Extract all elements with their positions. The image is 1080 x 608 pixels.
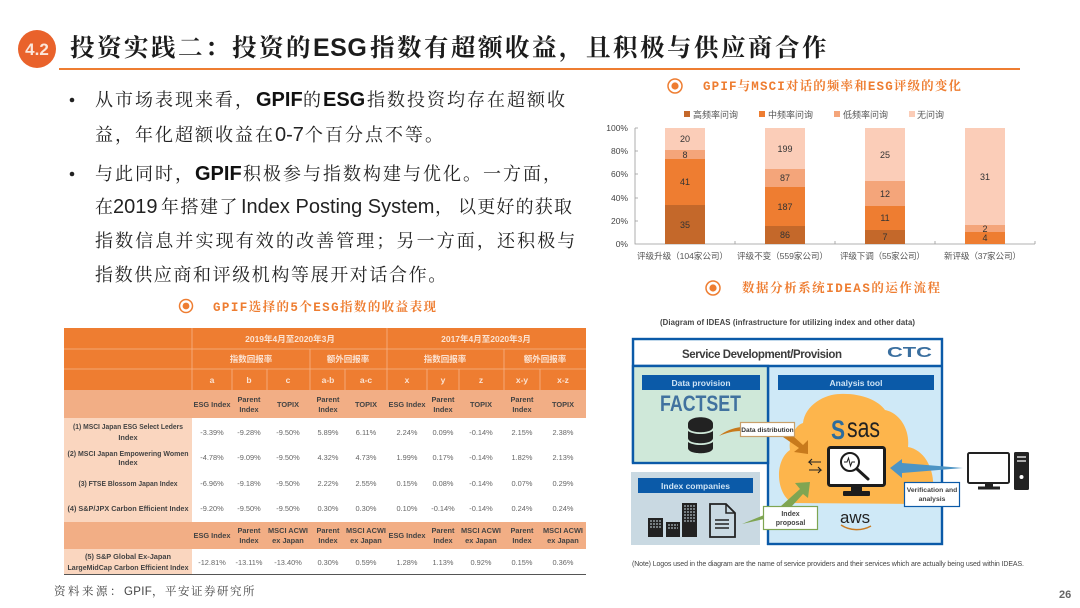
table data rows 1-4: 5.89% [318, 428, 339, 437]
table row 5 [64, 549, 574, 574]
logo: CTC: CTC [887, 344, 932, 361]
icon: analysis monitor [828, 448, 884, 496]
text block: bullet points: 益，年化超额收益在 [95, 125, 275, 145]
table row 5: 0.30% [318, 558, 339, 567]
table row 5: 1.13% [433, 558, 454, 567]
bar: new rating: 新评级（37家公司） [944, 250, 1021, 261]
table data rows 1-4: -9.20% [200, 504, 224, 513]
panel: data provision [633, 366, 768, 463]
bar: rating downgrade: 12 [880, 189, 890, 199]
table header: dark orange rows: x [405, 375, 410, 385]
bar: rating downgrade: 11 [880, 213, 890, 223]
panel: data provision: Data provision [671, 378, 731, 388]
arrow: verification [890, 459, 963, 478]
bar: rating unchanged: 199 [777, 144, 793, 154]
table subheader row: TOPIX [277, 400, 299, 409]
table second subheader: Index [433, 536, 454, 545]
logo: sas [831, 412, 880, 445]
table row 5: -12.81% [198, 558, 226, 567]
table row labels: (4) S&P/JPX Carbon Efficient Index [68, 504, 189, 513]
table header: dark orange rows: a [210, 375, 215, 385]
subheading: dialogue chart: GPIF与MSCI对话的频率和ESG评级的变化 [703, 78, 961, 94]
table second subheader: Index [512, 536, 533, 545]
bar: rating unchanged: 86 [780, 230, 790, 240]
table data rows 1-4: 4.32% [318, 453, 339, 462]
table subheader row: ESG Index [194, 400, 231, 409]
table second subheader: ex Japan [465, 536, 497, 545]
text block: bullet points: 0-7 [275, 124, 304, 146]
icon: database [688, 417, 713, 453]
table header: dark orange rows: x-y [516, 375, 528, 385]
y axis: 20% [611, 216, 628, 226]
bar: new rating [944, 128, 1021, 261]
table row labels: Index [118, 458, 139, 467]
table row labels: (2) MSCI Japan Empowering Women [68, 449, 189, 458]
table header: dark orange rows [64, 328, 586, 390]
table data rows 1-4: -9.50% [276, 504, 300, 513]
table row 5: 0.59% [356, 558, 377, 567]
bar: rating unchanged: 187 [777, 202, 793, 212]
table subheader row: ESG Index [389, 400, 426, 409]
chart legend: 无问询 [917, 109, 944, 120]
table data rows 1-4: -9.50% [276, 428, 300, 437]
table second subheader: Parent [316, 526, 340, 535]
table row labels [64, 418, 192, 522]
table second subheader: Index [318, 536, 339, 545]
table data rows 1-4: -9.28% [237, 428, 261, 437]
bar: rating upgrade: 评级升级（104家公司） [637, 250, 728, 261]
table data rows 1-4: -6.96% [200, 479, 224, 488]
text block: bullet points: GPIF [195, 163, 242, 185]
chart legend: 低频率问询 [843, 109, 888, 120]
table data rows 1-4: -9.50% [237, 504, 261, 513]
section badge 4.2: 4.2 [25, 40, 49, 59]
logo: sas: S [831, 415, 845, 445]
icon: buildings [648, 503, 697, 537]
table data rows 1-4: 2.22% [318, 479, 339, 488]
table subheader row: Parent [431, 395, 455, 404]
table second subheader: Parent [431, 526, 455, 535]
y axis: 0% [616, 239, 628, 249]
title underline [59, 68, 1020, 70]
panel: index companies: Index companies [661, 481, 730, 491]
table data rows 1-4: 2.13% [553, 453, 574, 462]
callout: index proposal: Index [781, 511, 800, 518]
table data rows 1-4: -3.39% [200, 428, 224, 437]
table data rows 1-4: 2.55% [356, 479, 377, 488]
table row 5: (5) S&P Global Ex-Japan [85, 552, 172, 561]
bar: rating downgrade: 25 [880, 150, 890, 160]
table header: dark orange rows: 指数回报率 [230, 354, 273, 364]
table second subheader: MSCI ACWI [268, 526, 308, 535]
table data rows 1-4: -0.14% [469, 453, 493, 462]
callout: verification and analysis [904, 482, 960, 506]
table second subheader: MSCI ACWI [543, 526, 583, 535]
table second subheader: ESG Index [389, 531, 426, 540]
table second subheader: Parent [510, 526, 534, 535]
panel: data provision: FACTSET [660, 391, 741, 416]
bar: rating unchanged [737, 128, 828, 261]
callout: verification and analysis: Verification and [907, 487, 957, 494]
table data rows 1-4: 0.15% [397, 479, 418, 488]
source note: 资料来源： [54, 586, 124, 598]
table second subheader: ex Japan [547, 536, 579, 545]
outer frame [630, 339, 942, 547]
table data rows 1-4: 0.30% [318, 504, 339, 513]
table subheader row: Index [433, 405, 454, 414]
table subheader row: Parent [510, 395, 534, 404]
table data rows 1-4 [200, 428, 574, 513]
table subheader row: Parent [237, 395, 261, 404]
bar: rating unchanged: 评级不变（559家公司） [737, 250, 828, 261]
table subheader row: Index [318, 405, 339, 414]
callout: index proposal: proposal [776, 520, 805, 527]
table data rows 1-4: -0.14% [469, 479, 493, 488]
table second subheader: MSCI ACWI [346, 526, 386, 535]
table data rows 1-4: -0.14% [469, 428, 493, 437]
table subheader row: TOPIX [470, 400, 492, 409]
chart legend [684, 109, 944, 120]
callout: index proposal [764, 506, 818, 530]
table data rows 1-4: -9.50% [276, 453, 300, 462]
table data rows 1-4: -0.14% [431, 504, 455, 513]
text block: bullet points: 从市场表现来看， [95, 90, 255, 110]
table header: dark orange rows: 2019年4月至2020年3月 [245, 334, 335, 344]
table data rows 1-4: 1.82% [512, 453, 533, 462]
bar: new rating: 4 [982, 233, 988, 243]
analysis tool bar [778, 375, 934, 390]
bar: rating upgrade [637, 128, 728, 261]
table subheader row: TOPIX [552, 400, 574, 409]
table header: dark orange rows: 额外回报率 [327, 354, 370, 364]
callout: data distribution: Data distribution [741, 427, 794, 434]
text block: bullet points [70, 89, 577, 285]
table data rows 1-4: 0.24% [553, 504, 574, 513]
icon: desktop computer [968, 452, 1029, 490]
table header: dark orange rows: x-z [557, 375, 569, 385]
logo: sas: sas [847, 412, 880, 443]
table data rows 1-4: -9.09% [237, 453, 261, 462]
y axis: 80% [611, 146, 628, 156]
table data rows 1-4: 0.10% [397, 504, 418, 513]
table data rows 1-4: 2.15% [512, 428, 533, 437]
table subheader row: Index [239, 405, 260, 414]
table subheader row: Parent [316, 395, 340, 404]
table: ESG index returns [64, 328, 586, 575]
panel: index companies [631, 472, 760, 545]
y axis: 60% [611, 169, 628, 179]
table data rows 1-4: 0.08% [433, 479, 454, 488]
table subheader row: TOPIX [355, 400, 377, 409]
table row labels: (1) MSCI Japan ESG Select Leders [73, 422, 183, 431]
text block: bullet points: ESG [323, 89, 365, 111]
table header: dark orange rows: b [246, 375, 252, 385]
table row 5: -13.11% [236, 558, 263, 567]
table row 5: LargeMidCap Carbon Efficient Index [68, 563, 189, 572]
title: ESG [313, 34, 367, 62]
arrow: index proposal [742, 482, 810, 524]
source note: GPIF [124, 586, 152, 598]
subheading: IDEAS flow: 数据分析系统IDEAS的运作流程 [742, 280, 940, 296]
text block: bullet points: 积极参与指数构建与优化。一方面， [243, 163, 563, 184]
text block: bullet points: 在 [95, 197, 115, 217]
icon: exchange arrows [809, 459, 821, 473]
text block: bullet points: 个百分点不等。 [305, 125, 445, 145]
table data rows 1-4: 0.09% [433, 428, 454, 437]
table data rows 1-4: 1.99% [397, 453, 418, 462]
text block: bullet points: 2019 [113, 196, 158, 218]
y axis: 100% [606, 123, 628, 133]
diagram note: (Note) Logos used in the diagram are the name of service providers and their services which are actually being used within IDEAS. [632, 561, 1024, 568]
text block: bullet points: 指数供应商和评级机构等展开对话合作。 [95, 265, 448, 285]
bar: rating upgrade: 8 [682, 150, 688, 160]
table header: dark orange rows: 额外回报率 [524, 354, 567, 364]
chart legend: 中频率问询 [768, 109, 813, 120]
source note: ，平安证券研究所 [152, 584, 256, 598]
section badge 4.2 [18, 30, 56, 68]
table row 5: -13.40% [274, 558, 302, 567]
text block: bullet points: 以更好的获取 [458, 197, 573, 217]
y axis: 40% [611, 193, 628, 203]
analysis tool bar: Analysis tool [830, 378, 882, 388]
text block: bullet points: 指数信息并实现有效的改善管理；另一方面，还积极与 [95, 230, 577, 251]
bar: rating upgrade: 41 [680, 177, 690, 187]
table row 5: 0.36% [553, 558, 574, 567]
table data rows 1-4: -0.14% [469, 504, 493, 513]
table second subheader: ex Japan [350, 536, 382, 545]
y axis [606, 123, 1035, 249]
diagram caption: (Diagram of IDEAS (infrastructure for utilizing index and other data) [660, 318, 915, 327]
chart legend: 高频率问询 [693, 109, 738, 120]
title: 投资实践二：投资的 [70, 35, 313, 62]
table data rows 1-4: -4.78% [200, 453, 224, 462]
bar: rating downgrade: 7 [882, 232, 888, 242]
table second subheader: Parent [237, 526, 261, 535]
bar: new rating: 31 [980, 172, 990, 182]
table subheader row [64, 390, 586, 418]
table header: dark orange rows: 指数回报率 [424, 354, 467, 364]
callout: verification and analysis: analysis [919, 496, 946, 503]
table second subheader: MSCI ACWI [461, 526, 501, 535]
subheading: ESG index returns: GPIF选择的5个ESG指数的收益表现 [213, 299, 436, 315]
bar: new rating: 2 [982, 224, 988, 234]
text block: bullet points: ， [435, 197, 455, 217]
table data rows 1-4: 2.24% [397, 428, 418, 437]
table subheader row: Index [512, 405, 533, 414]
table data rows 1-4: 0.24% [512, 504, 533, 513]
table second subheader [64, 522, 586, 549]
text block: bullet points: 与此同时， [95, 164, 195, 184]
stacked bar chart [606, 109, 1035, 261]
text block: bullet points: 年搭建了 [161, 196, 239, 217]
table header: dark orange rows: a-c [360, 375, 372, 385]
table second subheader: Index [239, 536, 260, 545]
table row labels: Index [118, 433, 139, 442]
table data rows 1-4: -9.18% [237, 479, 261, 488]
text block: bullet points: Index Posting System [241, 196, 434, 218]
text block: bullet points: GPIF [256, 89, 303, 111]
text block: bullet points: 的 [303, 90, 323, 110]
table second subheader: ex Japan [272, 536, 304, 545]
cloud [779, 394, 933, 504]
bar: rating upgrade: 20 [680, 134, 690, 144]
table data rows 1-4: 0.29% [553, 479, 574, 488]
title: 指数有超额收益，且积极与供应商合作 [370, 34, 829, 62]
table header: dark orange rows: y [441, 375, 446, 385]
table header: dark orange rows: c [286, 375, 291, 385]
table data rows 1-4: 0.17% [433, 453, 454, 462]
table row 5: 0.92% [471, 558, 492, 567]
text block: bullet points: 指数投资均存在超额收 [367, 89, 567, 110]
table header: dark orange rows: z [479, 375, 483, 385]
table second subheader: ESG Index [194, 531, 231, 540]
table data rows 1-4: -9.50% [276, 479, 300, 488]
table header: dark orange rows: 2017年4月至2020年3月 [441, 334, 531, 344]
table header: dark orange rows: a-b [322, 375, 334, 385]
page number: 26 [1059, 589, 1071, 601]
bar: rating unchanged: 87 [780, 173, 790, 183]
bar: rating upgrade: 35 [680, 220, 690, 230]
bar: rating downgrade [840, 128, 925, 261]
table row 5: 0.15% [512, 558, 533, 567]
table row labels: (3) FTSE Blossom Japan Index [78, 479, 178, 488]
callout: data distribution [740, 422, 794, 436]
outer frame: Service Development/Provision [682, 349, 842, 361]
icon: document [710, 504, 735, 537]
table data rows 1-4: 0.30% [356, 504, 377, 513]
arrow: data distribution [719, 427, 808, 454]
table data rows 1-4: 0.07% [512, 479, 533, 488]
table row 5: 1.28% [397, 558, 418, 567]
bar: rating downgrade: 评级下调（55家公司） [840, 250, 925, 261]
table data rows 1-4: 2.38% [553, 428, 574, 437]
table data rows 1-4: 6.11% [356, 428, 377, 437]
logo: aws: aws [840, 508, 870, 527]
diagram: IDEAS [630, 318, 1029, 568]
table data rows 1-4: 4.73% [356, 453, 377, 462]
